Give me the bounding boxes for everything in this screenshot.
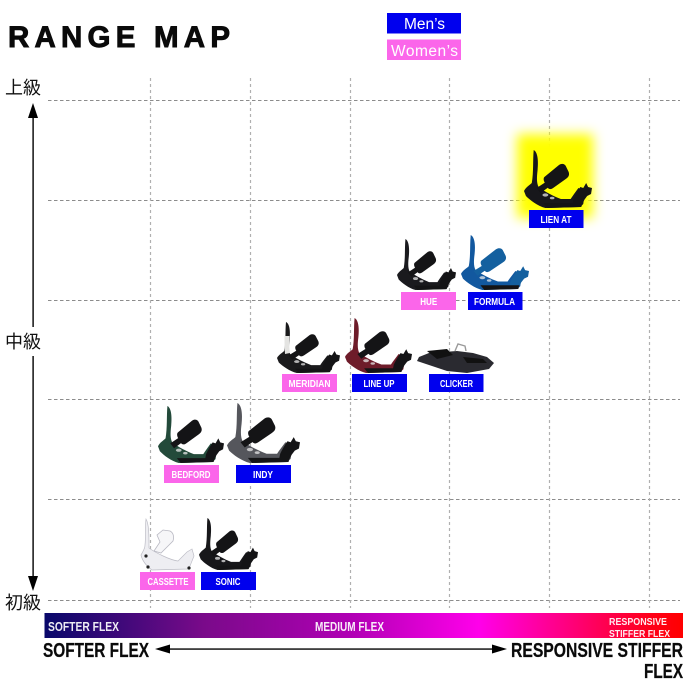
icon: sonic binding <box>199 518 258 570</box>
highlight glow: lien at <box>517 134 593 218</box>
binding: lien at <box>524 150 592 228</box>
label: advanced: 上級 <box>5 78 41 98</box>
binding: line up <box>345 318 412 392</box>
flex gradient bar <box>44 613 683 640</box>
bar label: responsive stiffer flex: RESPONSIVE <box>609 616 667 628</box>
title: RANGE MAP <box>8 21 230 54</box>
legend: women's: Women’s <box>391 43 458 60</box>
chart grid <box>48 78 680 608</box>
label: cassette: CASSETTE <box>148 576 188 588</box>
label: line up: LINE UP <box>364 378 394 390</box>
label: intermediate: 中級 <box>5 332 41 352</box>
label: formula: FORMULA <box>474 296 515 308</box>
binding: clicker <box>417 344 494 392</box>
label: bedford: BEDFORD <box>172 469 211 481</box>
bar label: responsive stiffer flex: STIFFER FLEX <box>609 628 670 640</box>
icon: meridian binding <box>277 322 340 373</box>
bar label: softer flex: SOFTER FLEX <box>48 620 120 634</box>
legend: men's: Men’s <box>404 16 445 33</box>
vertical axis <box>5 78 41 613</box>
binding: bedford <box>158 406 224 483</box>
icon: formula binding <box>461 235 529 290</box>
bar label: responsive stiffer flex <box>609 616 670 640</box>
icon: bedford binding <box>158 406 224 463</box>
accent: white highback on meridian <box>284 336 290 354</box>
binding: indy <box>227 403 300 483</box>
icon: indy binding <box>227 403 300 463</box>
bar label: medium flex: MEDIUM FLEX <box>315 620 385 634</box>
binding: hue <box>397 239 456 310</box>
label: hue: HUE <box>420 296 437 308</box>
label: sonic: SONIC <box>216 576 241 588</box>
binding: formula <box>461 235 529 310</box>
label: lien at: LIEN AT <box>540 214 572 226</box>
icon: lien at binding <box>524 150 592 208</box>
icon: cassette binding <box>141 519 194 570</box>
heading: responsive stiffer flex <box>511 640 683 683</box>
label: clicker: CLICKER <box>440 378 473 390</box>
label: meridian: MERIDIAN <box>288 378 330 390</box>
label: indy: INDY <box>253 469 273 481</box>
icon: clicker binding <box>417 344 494 373</box>
binding: meridian <box>277 322 340 392</box>
icon: line up binding <box>345 318 412 373</box>
binding: cassette <box>140 519 195 590</box>
label: beginner: 初級 <box>5 593 41 613</box>
icon: hue binding <box>397 239 456 290</box>
legend <box>387 13 461 60</box>
arrow: flex direction <box>155 644 507 654</box>
heading: softer flex: SOFTER FLEX <box>43 640 149 662</box>
binding: sonic <box>199 518 258 590</box>
arrow: skill level <box>28 103 38 591</box>
heading: responsive stiffer flex: FLEX <box>644 661 683 683</box>
